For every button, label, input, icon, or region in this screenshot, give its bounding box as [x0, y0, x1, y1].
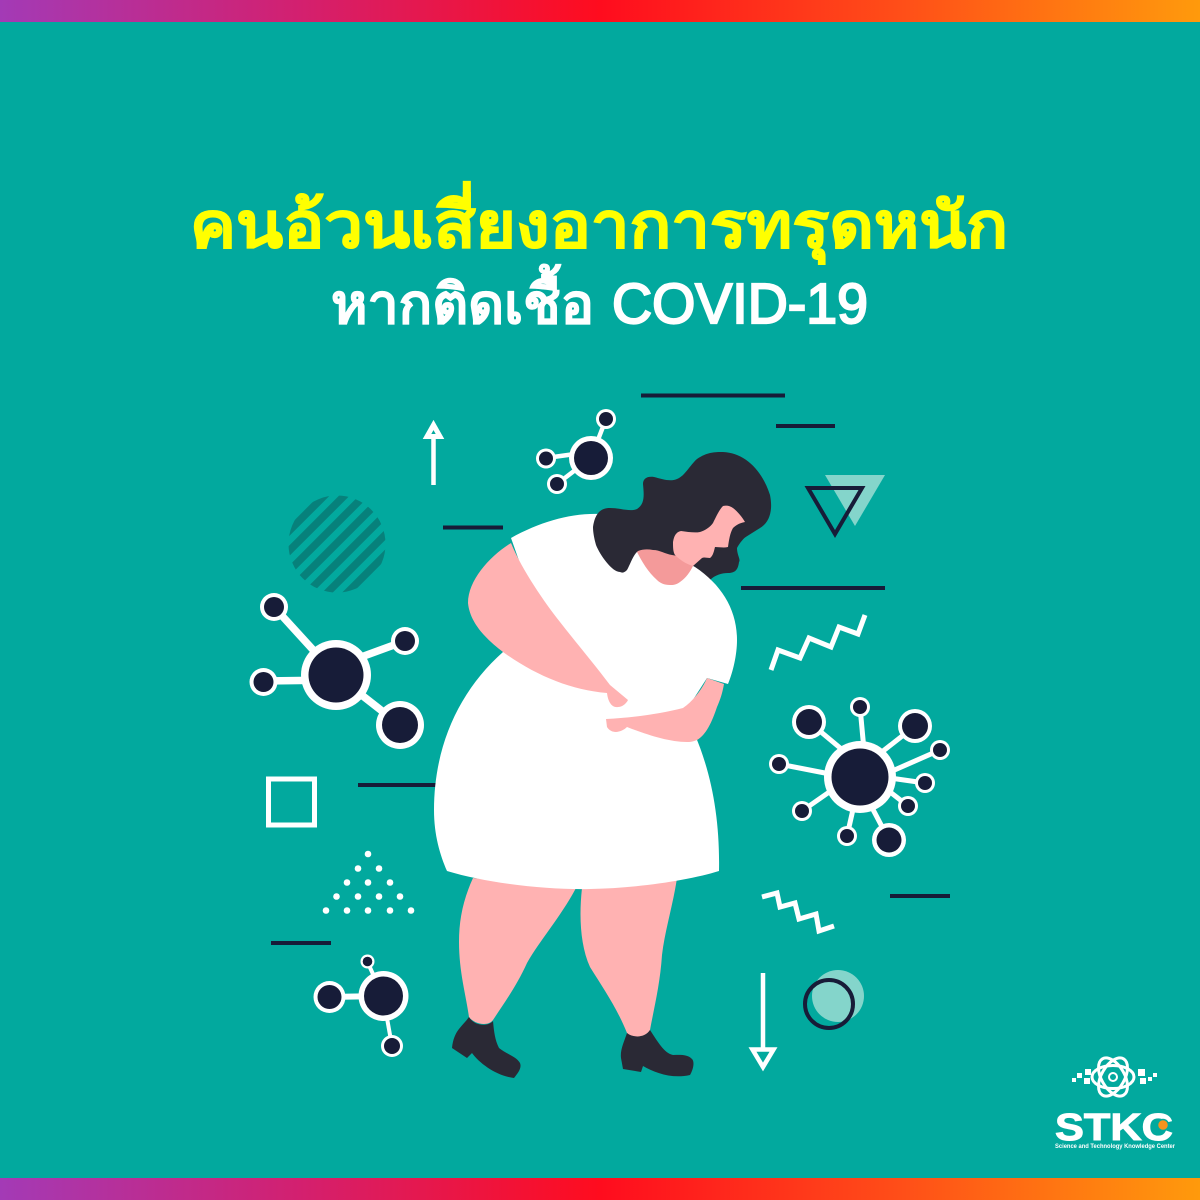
icon: square outline	[268, 779, 314, 825]
boots	[452, 1017, 693, 1078]
logo atom icon	[1072, 1053, 1157, 1101]
title	[190, 181, 1008, 336]
logo: STKC	[1055, 1053, 1176, 1150]
logo tagline: Science and Technology Knowledge Center	[1055, 1144, 1176, 1150]
woman illustration	[434, 452, 771, 1078]
icon: lower left virus	[314, 954, 408, 1057]
dress torso	[511, 514, 737, 720]
hair	[593, 452, 771, 573]
logo orange dot	[1158, 1120, 1168, 1130]
title line 2 Thai: หากติดเชื้อ	[331, 264, 594, 335]
icon: dot triangle	[323, 851, 414, 914]
decorative dark lines	[271, 396, 950, 943]
icon: large left virus	[250, 593, 424, 749]
icon: zigzag lower	[762, 893, 834, 931]
bottom gradient bar	[0, 1178, 1200, 1200]
icon: right virus	[769, 697, 950, 857]
top gradient bar	[0, 0, 1200, 22]
icon: striped circle	[288, 496, 386, 592]
icon: arrow up	[427, 425, 440, 485]
icon: zigzag upper	[771, 615, 865, 670]
icon: overlapping circles	[805, 970, 864, 1028]
icon: top virus	[536, 409, 616, 494]
face	[673, 506, 745, 566]
neck	[636, 540, 693, 585]
title line 1: คนอ้วนเสี่ยงอาการทรุดหนัก	[190, 181, 1008, 265]
logo wordmark: STKC	[1055, 1107, 1173, 1149]
back hair	[690, 528, 760, 580]
title line 2 Latin: COVID-19	[612, 272, 868, 336]
dress skirt	[434, 652, 719, 889]
right arm	[606, 678, 724, 742]
icon: arrow down	[752, 973, 774, 1067]
legs	[459, 878, 677, 1037]
icon: triangles	[808, 475, 885, 534]
left arm	[468, 543, 628, 707]
